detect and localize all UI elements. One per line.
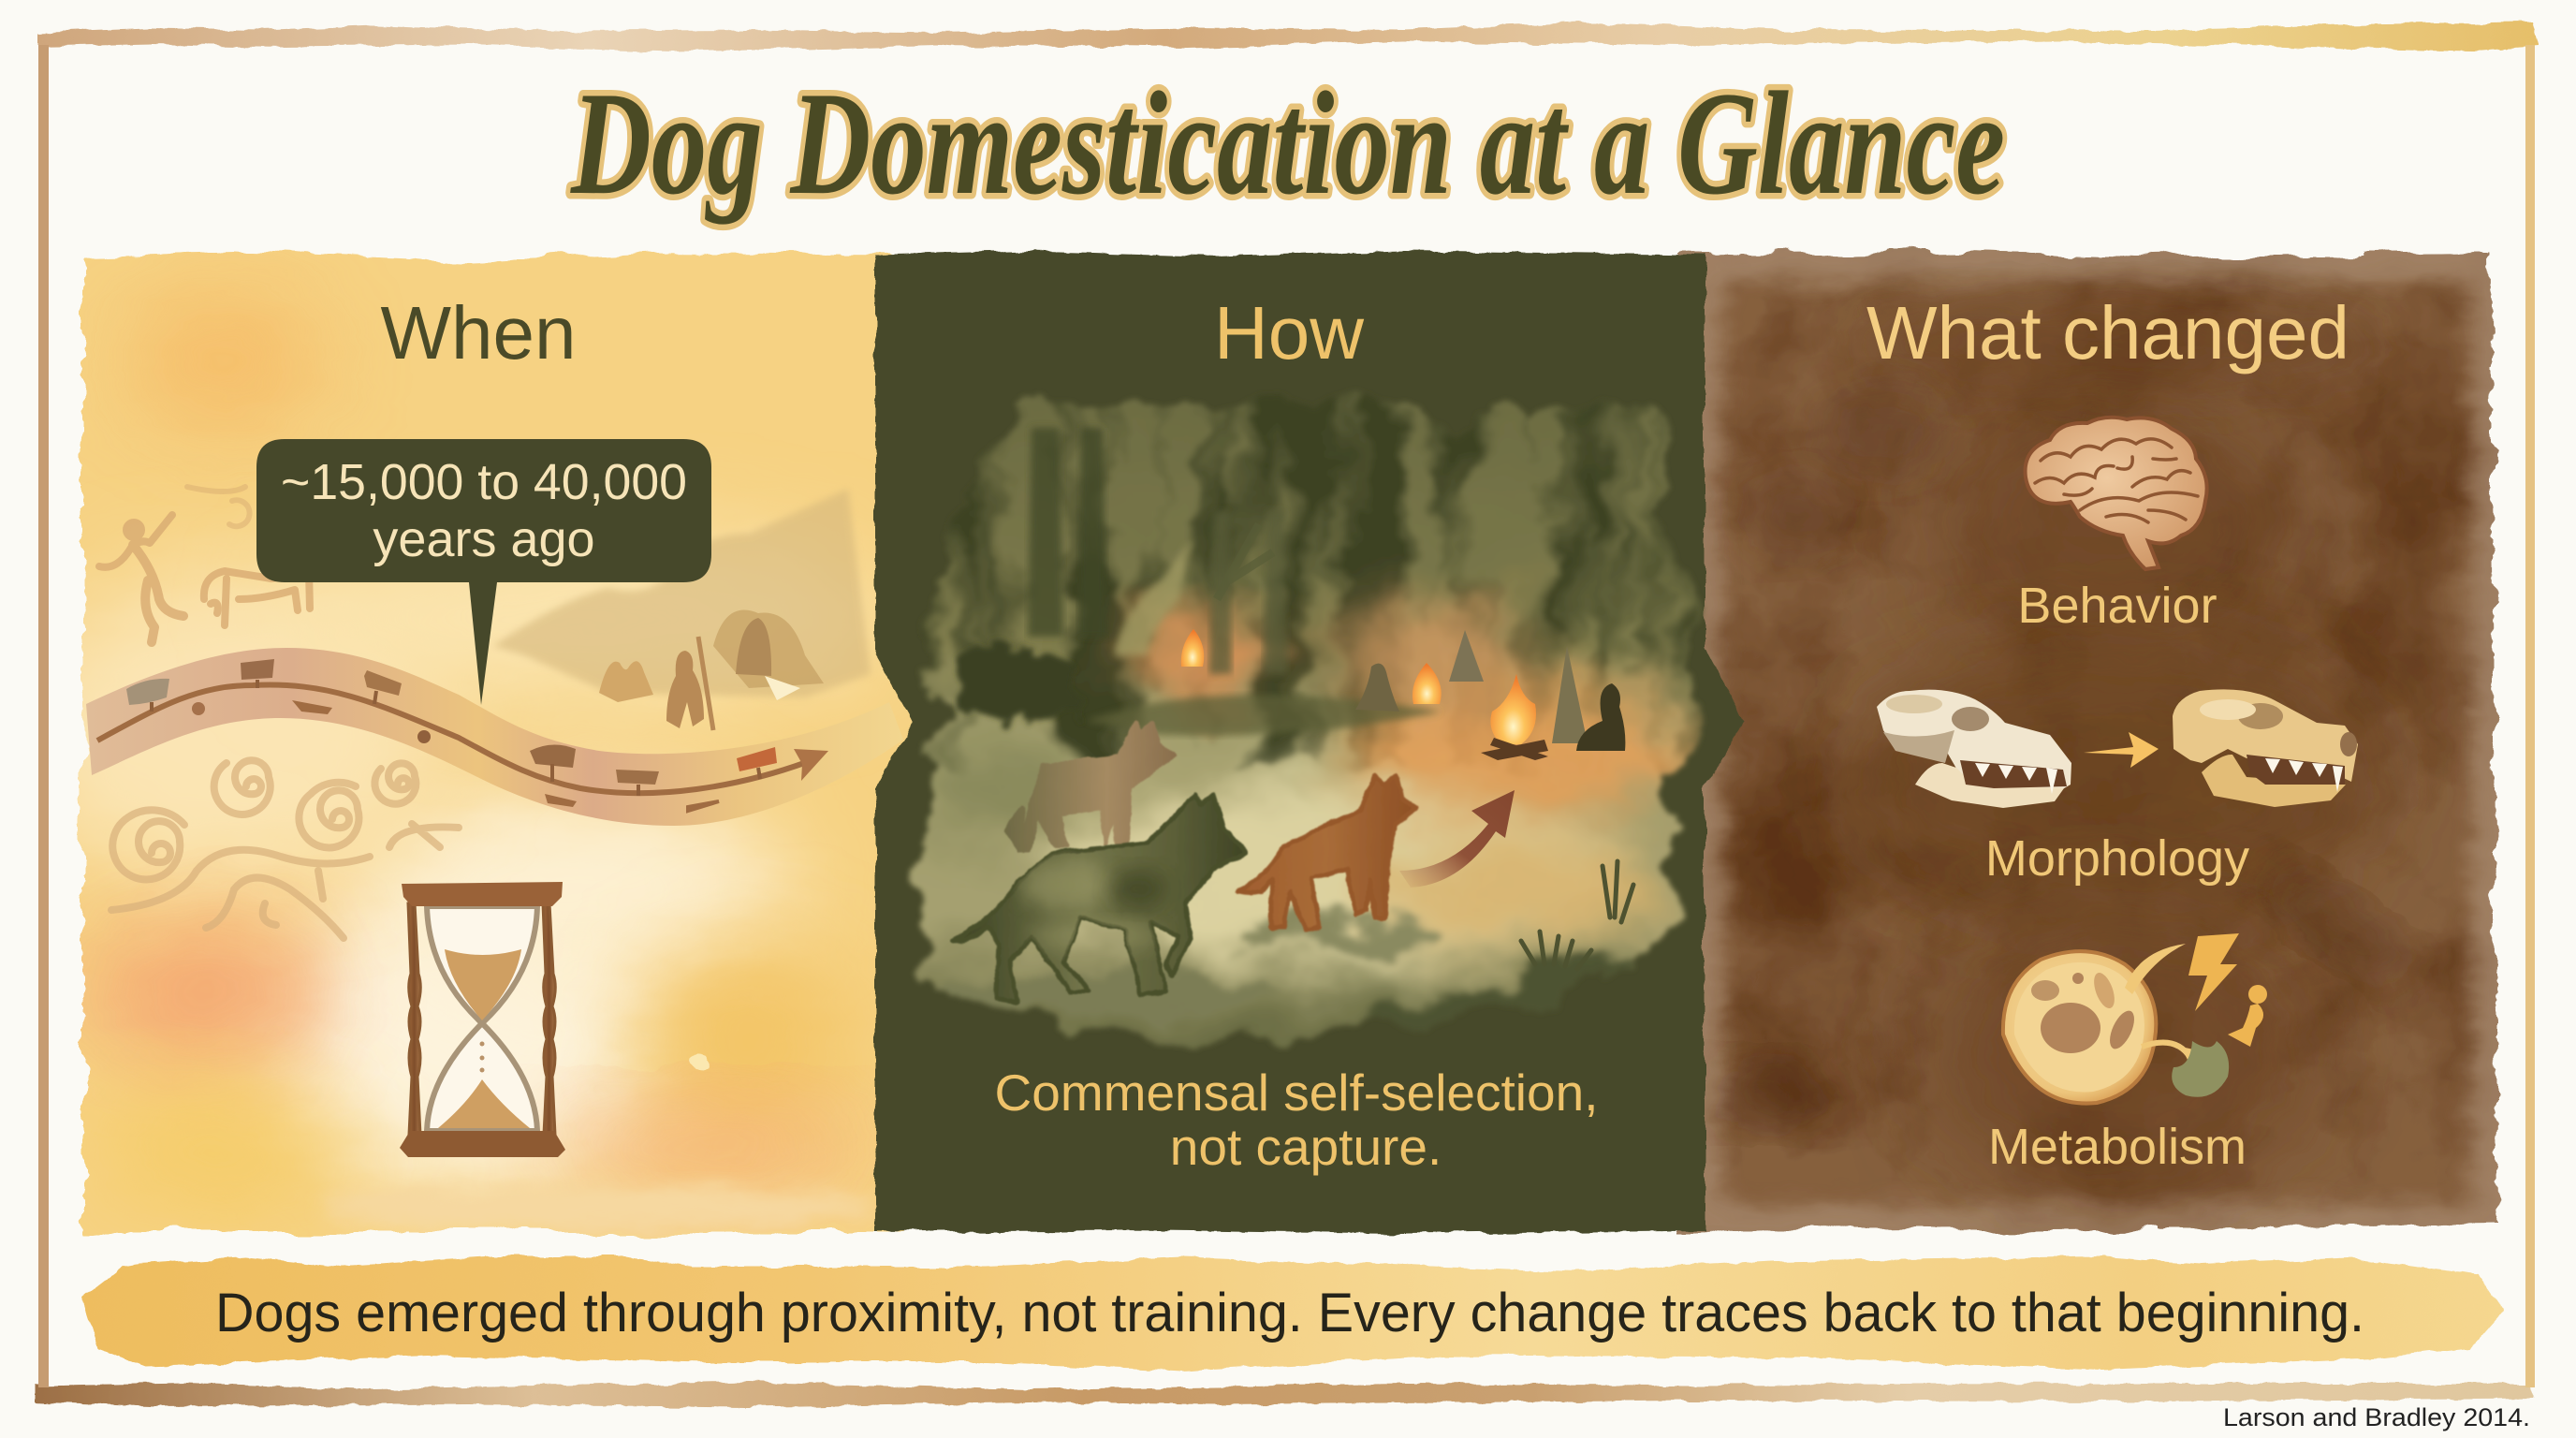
tents and seated figures: [1355, 630, 1625, 751]
scene: forest clearing with wolves and fires: [899, 374, 1704, 1058]
label: morphology: Morphology: [1985, 830, 2249, 887]
callout: time range: ~15,000 to 40,000: [281, 454, 687, 510]
heading: how: How: [1214, 291, 1364, 374]
callout: time range: years ago: [373, 511, 595, 567]
icon: brain: [2026, 418, 2207, 569]
cave art: spirals and branches: [111, 760, 459, 938]
cave art: dancer and animal: [99, 487, 310, 642]
icon: wolf skull: [1877, 690, 2071, 808]
panel: what changed: [1666, 234, 2537, 1245]
heading: what changed: What changed: [1866, 291, 2349, 374]
wolf: large front dark: [952, 795, 1246, 1002]
icon: cell with metabolism symbols: [2003, 933, 2267, 1104]
title: Dog Domestication at a Glance: [569, 62, 2005, 226]
panel: how: [875, 251, 1744, 1234]
arrow: skull change: [2084, 732, 2159, 768]
wolf: rear muted: [1006, 724, 1174, 850]
icon: hourglass: [400, 882, 565, 1157]
grass tufts: [1521, 861, 1633, 969]
hills, cave and people: [493, 489, 871, 730]
campfires: [1181, 629, 1548, 760]
label: metabolism: Metabolism: [1988, 1119, 2247, 1175]
timeline ribbon with arrow: [86, 648, 903, 826]
heading: when: When: [381, 291, 576, 374]
label: behavior: Behavior: [2017, 578, 2217, 634]
arrow: wolf toward fire: [1399, 790, 1515, 888]
panel: when: [77, 249, 913, 1240]
citation: Larson and Bradley 2014.: [2223, 1403, 2530, 1431]
callout: time range: [256, 439, 711, 705]
icon: dog skull: [2173, 689, 2358, 807]
forest trees: [954, 428, 1442, 736]
panel background: what changed: [1666, 234, 2537, 1245]
caption: how: not capture.: [1170, 1118, 1442, 1176]
scene background: [899, 374, 1704, 1058]
panel background: when: [77, 249, 913, 1240]
wolf: red approaching: [1237, 775, 1416, 931]
caption: how: [995, 1064, 1598, 1176]
panel background: how: [875, 251, 1744, 1234]
caption: how: Commensal self-selection,: [995, 1064, 1598, 1122]
banner: [82, 1256, 2504, 1372]
banner: Dogs emerged through proximity, not training. Every change traces back to that beginning.: [215, 1283, 2364, 1343]
